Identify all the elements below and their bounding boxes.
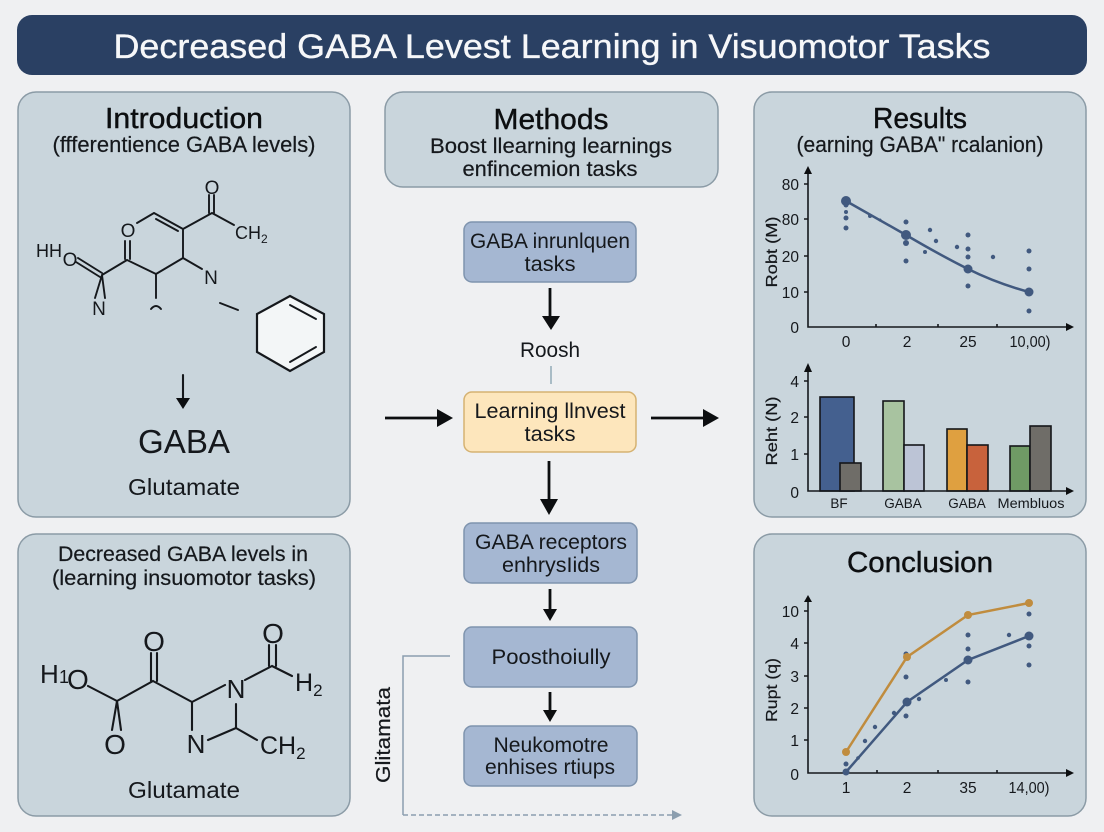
chemical structure: GABA molecule: N: [204, 268, 218, 289]
chemical structure: glutamate molecule: O: [67, 664, 89, 695]
chemical structure: glutamate molecule: H: [295, 669, 313, 697]
chemical structure: GABA molecule: O: [205, 178, 219, 199]
line chart with two series: 2: [790, 701, 799, 718]
results heading: (earning GABA" rcalanion): [796, 132, 1044, 157]
line chart with two series: 2: [903, 780, 911, 797]
chemical structure: glutamate molecule: [40, 618, 323, 763]
chemical structure: GABA molecule: 2: [261, 232, 268, 246]
methods description: Boost llearning learnings: [430, 135, 672, 158]
arrow: structure to GABA: [176, 375, 190, 409]
grouped bar chart: [764, 363, 1074, 511]
flow step: Poosthoiully: Poosthoiully: [492, 646, 611, 669]
decreased GABA heading: Decreased GABA levels in: [58, 543, 308, 566]
flow step: Poosthoiully: [464, 627, 637, 687]
methods heading: Methods: [494, 104, 608, 136]
scatter chart with trend line: 10,00): [1010, 334, 1050, 351]
panel: methods: [385, 92, 718, 187]
chemical structure: GABA molecule: O: [121, 221, 135, 242]
conclusion heading: Conclusion: [847, 547, 993, 579]
chemical structure: GABA molecule: N: [92, 299, 106, 320]
scatter chart with trend line: 10: [782, 285, 799, 302]
scatter chart with trend line: 25: [959, 334, 977, 351]
grouped bar chart: 4: [790, 374, 799, 391]
scatter chart with trend line: Robt (M): [764, 216, 781, 288]
grouped bar chart: 0: [790, 485, 799, 502]
chemical structure: glutamate molecule: H: [40, 659, 59, 689]
chemical structure: GABA molecule: HH: [36, 241, 62, 261]
title banner: Decreased GABA Levest Learning in Visuomotor Tasks: [114, 28, 991, 66]
flow step: GABA inrunlquen tasks: [464, 222, 636, 282]
chemical structure: GABA molecule: [36, 178, 268, 320]
chemical structure: glutamate molecule: O: [104, 729, 126, 760]
GABA label: GABA: [138, 423, 230, 460]
scatter chart with trend line: 20: [782, 249, 799, 266]
chemical structure: glutamate molecule: O: [143, 626, 165, 657]
scatter chart with trend line: 0: [790, 320, 799, 337]
chemical structure: glutamate molecule: O: [262, 618, 284, 649]
chemical structure: GABA molecule: O: [63, 250, 77, 271]
arrow: to results: [651, 409, 719, 427]
feedback connector with dashed arrow: [403, 656, 682, 820]
grouped bar chart: 2: [790, 410, 799, 427]
introduction heading: [52, 103, 316, 157]
results heading: Results: [873, 103, 967, 135]
flow step: GABA receptors: GABA receptors: [475, 531, 627, 554]
line chart with two series: 0: [790, 767, 799, 784]
decreased GABA heading: (learning insuomotor tasks): [52, 567, 316, 590]
introduction heading: (ffferentience GABA levels): [52, 132, 316, 157]
glutamate label: Glutamate: [128, 474, 240, 500]
chemical structure: glutamate molecule: N: [187, 729, 205, 759]
flow step: highlighted learning tasks: Learning llnvest: [474, 400, 626, 423]
scatter chart with trend line: [764, 166, 1074, 351]
title banner: [17, 15, 1087, 75]
scatter chart with trend line: 2: [903, 334, 911, 351]
panel: introduction: [18, 92, 350, 517]
line chart with two series: 1: [790, 733, 799, 750]
grouped bar chart: Membluos: [998, 496, 1065, 511]
scatter chart with trend line: 0: [842, 334, 851, 351]
chemical structure: glutamate molecule: 2: [313, 681, 323, 700]
arrow: from introduction: [385, 409, 453, 427]
flow step: GABA receptors: enhrysIids: [502, 554, 600, 577]
panel: results: [754, 92, 1086, 517]
chemical structure: glutamate molecule: CH: [260, 732, 296, 760]
panel: decreased GABA levels: [18, 534, 350, 816]
line chart with two series: 10: [782, 604, 799, 621]
line chart with two series: 35: [959, 780, 977, 797]
line chart with two series: 3: [790, 669, 799, 686]
grouped bar chart: GABA: [884, 496, 922, 511]
arrow: step three down: [543, 589, 557, 621]
grouped bar chart: BF: [830, 496, 848, 511]
flow step: Neukomotre: Neukomotre: [494, 734, 608, 757]
panel: conclusion: [754, 534, 1086, 816]
decreased GABA heading: [52, 543, 316, 590]
scatter chart with trend line: 80: [782, 212, 799, 229]
arrow: step four down: [543, 692, 557, 722]
flow step: highlighted learning tasks: [464, 392, 636, 452]
scatter chart with trend line: 80: [782, 177, 799, 194]
chemical structure: glutamate molecule: 2: [296, 744, 306, 763]
methods description: [430, 135, 672, 181]
chemical structure: glutamate molecule: N: [227, 674, 245, 704]
grouped bar chart: 1: [790, 447, 799, 464]
rotated label: Glitamata: Glitamata: [373, 686, 395, 783]
arrow: step two down: [540, 461, 558, 515]
flow step: Neukomotre: [464, 726, 637, 786]
grouped bar chart: Reht (N): [764, 396, 781, 466]
line chart with two series: [764, 595, 1074, 797]
flow step: Neukomotre: enhises rtiups: [485, 756, 615, 779]
icon: hexagon ring: [257, 296, 324, 371]
arrow: step one down: [542, 288, 560, 330]
line chart with two series: 14,00): [1008, 780, 1050, 797]
chemical structure: glutamate molecule: 1: [59, 667, 69, 687]
introduction heading: Introduction: [105, 103, 263, 135]
chemical structure: GABA molecule: CH: [235, 223, 261, 243]
line chart with two series: 1: [842, 780, 850, 797]
results heading: [796, 103, 1044, 157]
label: Roosh: Roosh: [520, 339, 580, 362]
flow step: GABA inrunlquen tasks: GABA inrunlquen: [470, 230, 630, 253]
methods description: enfincemion tasks: [462, 158, 638, 181]
glutamate label: Glutamate: [128, 777, 240, 803]
flow step: highlighted learning tasks: tasks: [524, 423, 576, 446]
flow step: GABA inrunlquen tasks: tasks: [524, 253, 576, 276]
line chart with two series: 4: [790, 636, 799, 653]
flow step: GABA receptors: [464, 523, 637, 583]
grouped bar chart: GABA: [948, 496, 986, 511]
line chart with two series: Rupt (q): [764, 658, 781, 722]
